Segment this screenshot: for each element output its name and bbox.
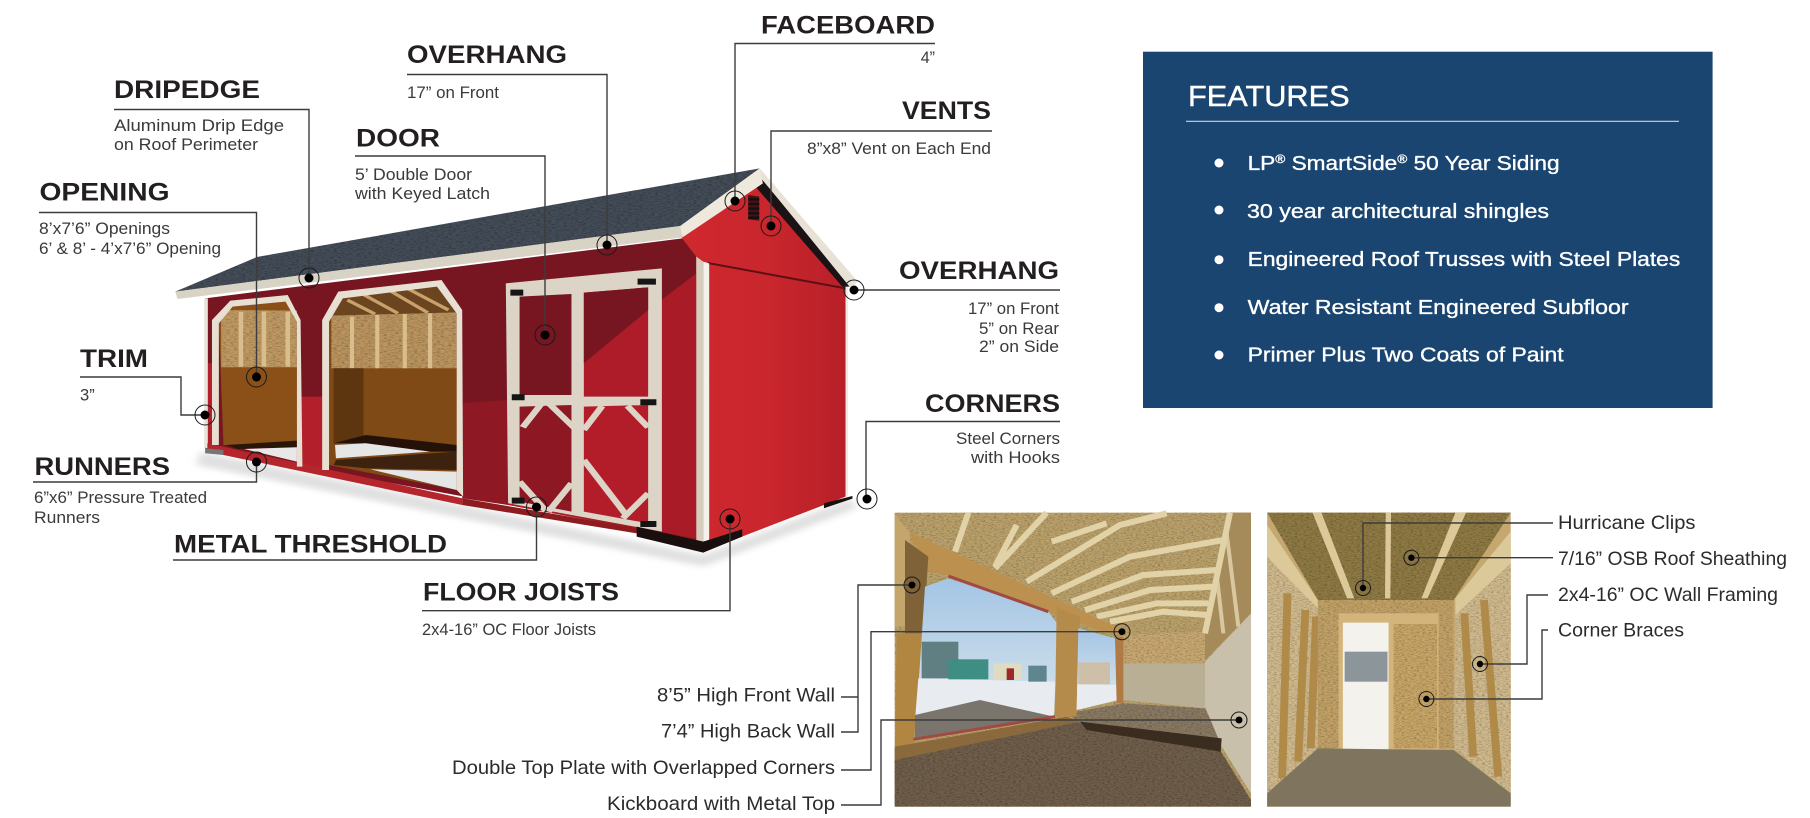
photo: interior with large openings: [895, 513, 1251, 807]
leader: wall heights: [841, 585, 912, 732]
marker: kickboard: [1231, 712, 1247, 728]
heading rule: [1186, 120, 1679, 122]
callout: metal threshold: [173, 497, 546, 560]
roof rafter right: [1421, 513, 1466, 598]
door opening: [1339, 613, 1439, 750]
window two view: [1077, 628, 1118, 710]
heading: DOOR: [356, 125, 440, 153]
floor: [895, 720, 1251, 807]
threshold plate: [205, 448, 223, 455]
detail: 5’ Double Door: [355, 166, 473, 184]
heading: VENTS: [902, 97, 991, 125]
roof rafter: [1312, 513, 1354, 598]
marker: roof sheathing: [1404, 550, 1419, 565]
marker: [725, 191, 745, 211]
marker: top plate: [1114, 624, 1130, 640]
kick beam: [895, 717, 1080, 760]
feature 5: Primer Plus Two Coats of Paint: [1248, 345, 1564, 367]
leader: [407, 74, 607, 245]
marker: [246, 452, 266, 472]
rear runner end: [824, 496, 852, 508]
back wall panel: [1123, 663, 1205, 708]
features panel: [1143, 52, 1713, 408]
heading: OVERHANG: [899, 257, 1059, 285]
callout: dripedge: [114, 76, 319, 288]
roof trusses: [955, 513, 1230, 633]
callout: overhang all sides: [844, 257, 1060, 356]
leader: roof sheathing: [1411, 557, 1553, 559]
detail: 3”: [80, 387, 95, 405]
far floor: [1067, 703, 1220, 740]
detail: 17” on Front: [968, 300, 1059, 318]
wall plates: [1267, 525, 1318, 608]
opening two: [322, 280, 463, 497]
right post: [1115, 637, 1123, 703]
side wall framing: [1205, 513, 1251, 660]
callout: corners: [857, 390, 1060, 509]
leader: [173, 507, 536, 560]
heading: FLOOR JOISTS: [423, 579, 619, 607]
corner board: [696, 257, 709, 542]
window one view: [913, 576, 1058, 739]
photo: interior with door: [1267, 513, 1511, 807]
callout: opening: [39, 179, 266, 387]
feature 1: SmartSide: [1285, 153, 1397, 175]
floor: [1267, 748, 1511, 807]
center post: [1055, 607, 1080, 717]
header beam: [908, 532, 1120, 635]
right wall: [1454, 563, 1511, 793]
end rake shadow: [757, 177, 852, 287]
left wall: [1267, 557, 1318, 793]
end wall edge: [846, 282, 848, 497]
heading: CORNERS: [925, 390, 1060, 418]
callout: trim: [80, 345, 215, 425]
label: corner braces: Corner Braces: [1558, 620, 1684, 642]
sunlit front wall: [508, 273, 696, 540]
detail: Aluminum Drip Edge: [114, 117, 284, 135]
callout: vents: [761, 97, 992, 236]
gable fascia: [680, 168, 763, 237]
feature 2: 30 year architectural shingles: [1247, 201, 1549, 223]
feature 4: Water Resistant Engineered Subfloor: [1248, 297, 1629, 319]
feature 3: Engineered Roof Trusses with Steel Plates: [1248, 249, 1680, 271]
leader: [854, 289, 1060, 291]
feature 1: [1214, 152, 1560, 175]
marker: [526, 497, 546, 517]
marker: wall heights: [904, 577, 920, 593]
callout: overhang front: [407, 41, 617, 255]
leader: [80, 377, 205, 415]
marker: [597, 235, 617, 255]
detail: 17” on Front: [407, 84, 499, 102]
detail: 8’x7’6” Openings: [39, 220, 170, 238]
marker: [761, 216, 781, 236]
heading: DRIPEDGE: [114, 76, 260, 104]
heading: FACEBOARD: [761, 12, 935, 40]
marker: corner braces: [1419, 692, 1434, 706]
leader: [33, 462, 256, 482]
leader: top plate: [841, 632, 1122, 770]
leader: hurricane clips: [1363, 523, 1553, 588]
back wall osb: [1123, 632, 1205, 663]
label: front wall: 8’5” High Front Wall: [657, 685, 835, 707]
roof rafter centre: [1385, 513, 1391, 598]
door leaf: [1394, 624, 1437, 748]
heading: OPENING: [40, 179, 170, 207]
sunlit left strip: [208, 363, 213, 445]
callout: door: [354, 125, 555, 345]
front fascia: [175, 226, 683, 299]
leader: [422, 519, 730, 611]
detail line two: with Keyed Latch: [354, 185, 490, 203]
corner trim: [204, 298, 208, 448]
detail: 4”: [921, 49, 935, 67]
feature 1: 50 Year Siding: [1407, 153, 1560, 175]
marker: [195, 405, 215, 425]
leader: [355, 156, 545, 335]
roof shingles: [175, 168, 760, 292]
double door: [506, 268, 662, 532]
callout: floor joists: [422, 509, 740, 639]
detail line two: 5” on Rear: [979, 320, 1060, 338]
leader: [735, 44, 935, 201]
detail: Steel Corners: [956, 430, 1060, 448]
heading: METAL THRESHOLD: [174, 531, 447, 559]
marker: [535, 325, 555, 345]
detail line two: 6’ & 8’ - 4’x7’6” Opening: [39, 240, 221, 258]
shaded lower wall: [462, 400, 508, 505]
left post: [895, 513, 928, 747]
label: top plate: Double Top Plate with Overlapped Corners: [452, 757, 835, 779]
door sill: [462, 498, 696, 543]
leader: corner braces: [1426, 630, 1548, 699]
leader: [866, 422, 1060, 499]
detail line two: on Roof Perimeter: [114, 136, 259, 154]
marker: [299, 268, 319, 288]
detail: 2x4-16” OC Floor Joists: [422, 621, 596, 639]
marker: [246, 367, 266, 387]
heading: OVERHANG: [407, 41, 567, 69]
label: kickboard: Kickboard with Metal Top: [607, 793, 835, 815]
label: wall framing: 2x4-16” OC Wall Framing: [1558, 584, 1778, 606]
leader: [39, 212, 256, 377]
ground shadow: [196, 452, 857, 567]
floor runner end: [637, 527, 742, 553]
callout: runners: [33, 452, 266, 527]
callouts: left photo: [452, 577, 1247, 815]
callouts: right photo: [1356, 512, 1787, 706]
heading: RUNNERS: [34, 453, 170, 481]
heading: TRIM: [80, 345, 148, 373]
marker: [720, 509, 740, 529]
front wall: [205, 237, 696, 540]
label: roof sheathing: 7/16” OSB Roof Sheathing: [1558, 548, 1787, 570]
panel background: [1143, 52, 1713, 408]
leader: wall framing: [1480, 595, 1548, 664]
gable seam: [708, 262, 846, 289]
opening one: [212, 295, 302, 467]
sill: [207, 443, 462, 505]
label: hurricane clips: Hurricane Clips: [1558, 512, 1696, 534]
kickboard: [1080, 722, 1222, 752]
roof sheathing: [1267, 513, 1511, 600]
marker: [844, 280, 864, 300]
panel heading: FEATURES: [1188, 81, 1350, 113]
callout: faceboard: [725, 12, 935, 211]
feature 1: LP: [1248, 153, 1272, 175]
side studs: [1282, 593, 1498, 778]
back wall: [1318, 600, 1454, 748]
marker: [857, 489, 877, 509]
end wall: [680, 185, 846, 552]
feature 1: ®: [1275, 152, 1285, 166]
end rake trim: [760, 168, 858, 287]
detail: 8”x8” Vent on Each End: [807, 140, 991, 158]
detail: 6”x6” Pressure Treated: [34, 489, 207, 507]
label: back wall: 7’4” High Back Wall: [661, 721, 835, 743]
feature 1: ®: [1397, 152, 1407, 166]
leader: [114, 110, 309, 278]
side wall: [1205, 613, 1251, 793]
detail line two: Runners: [34, 509, 100, 527]
sunlit pillar: [301, 397, 324, 472]
leader: kickboard: [841, 720, 1239, 805]
marker: wall framing: [1472, 656, 1488, 672]
shed illustration: [175, 168, 858, 567]
vent: [748, 195, 759, 221]
detail line three: 2” on Side: [979, 338, 1059, 356]
detail line two: with Hooks: [970, 449, 1060, 467]
marker: hurricane clips: [1356, 580, 1370, 596]
leader: [771, 131, 992, 226]
